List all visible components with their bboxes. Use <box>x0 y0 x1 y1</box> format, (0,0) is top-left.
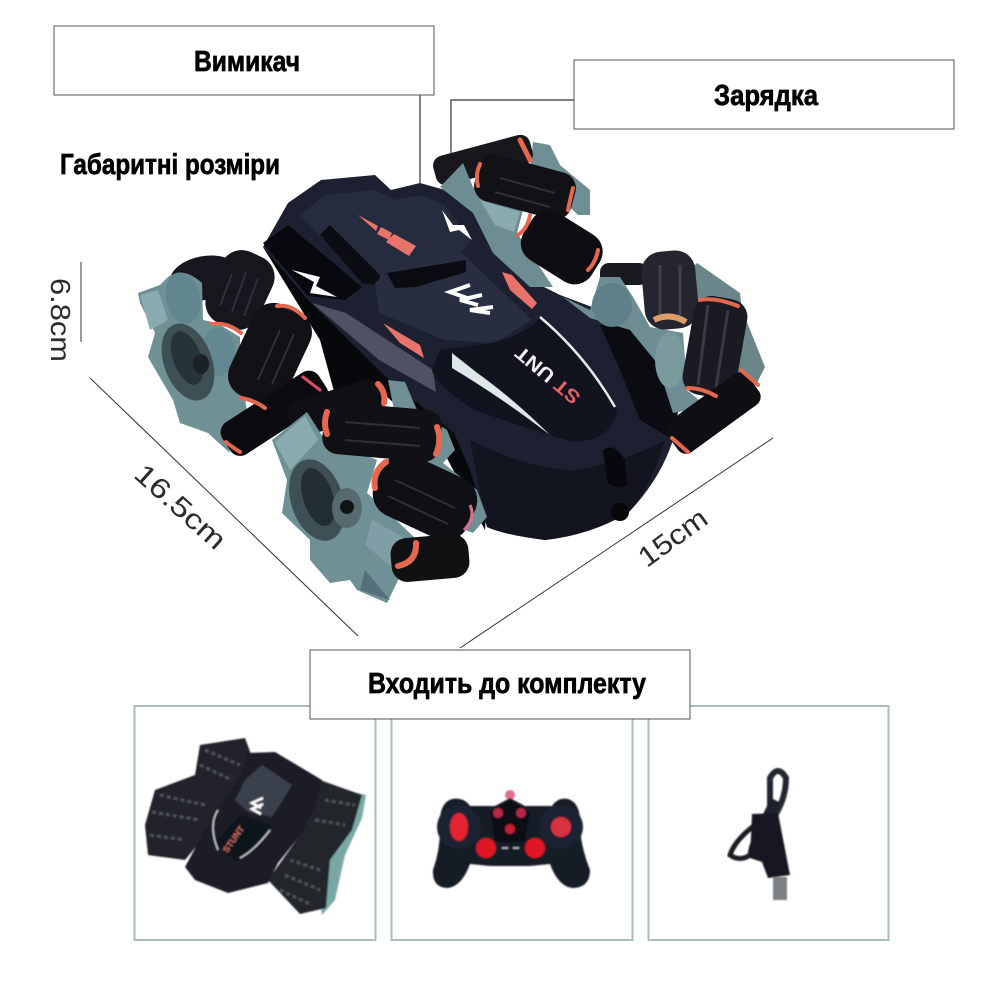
dimension: width: 15cm <box>632 502 713 573</box>
dimension: height <box>45 262 81 362</box>
callout: charging: Зарядка <box>714 80 819 112</box>
dimension: length: 16.5cm <box>128 458 232 556</box>
callout: included in set: Входить до комплекту <box>368 668 646 700</box>
callout: charging <box>574 60 954 129</box>
panel: remote controller <box>392 706 632 940</box>
panel: car <box>134 706 376 940</box>
dimension: width <box>460 438 773 648</box>
dimension: length <box>90 378 358 636</box>
dimension: height: 6.8cm <box>45 278 76 362</box>
leader line: charging <box>451 100 574 172</box>
small car image: STUNT <box>221 824 247 854</box>
underbody shadow <box>263 247 490 530</box>
heading: overall dimensions: Габаритні розміри <box>60 149 280 181</box>
front-left wheel <box>272 376 487 603</box>
pink decals <box>358 215 537 358</box>
chevrons <box>450 285 493 313</box>
controller image <box>433 790 590 888</box>
white stripes <box>540 317 615 407</box>
cable image <box>730 771 790 900</box>
car body <box>263 175 680 540</box>
callout: switch <box>54 26 434 95</box>
right wheel <box>563 249 765 458</box>
rear-right wheel <box>431 133 610 292</box>
main product: stunt car <box>138 133 765 603</box>
leader line: switch <box>419 95 421 186</box>
body logo: ST UNT <box>511 341 585 408</box>
callout: included in set <box>310 650 690 719</box>
lightning decals <box>292 210 472 297</box>
panel: USB cable <box>648 706 888 940</box>
small car image <box>145 738 366 915</box>
callout: switch: Вимикач <box>194 46 300 78</box>
body panels <box>263 190 680 540</box>
rear-left wheel <box>138 243 333 461</box>
